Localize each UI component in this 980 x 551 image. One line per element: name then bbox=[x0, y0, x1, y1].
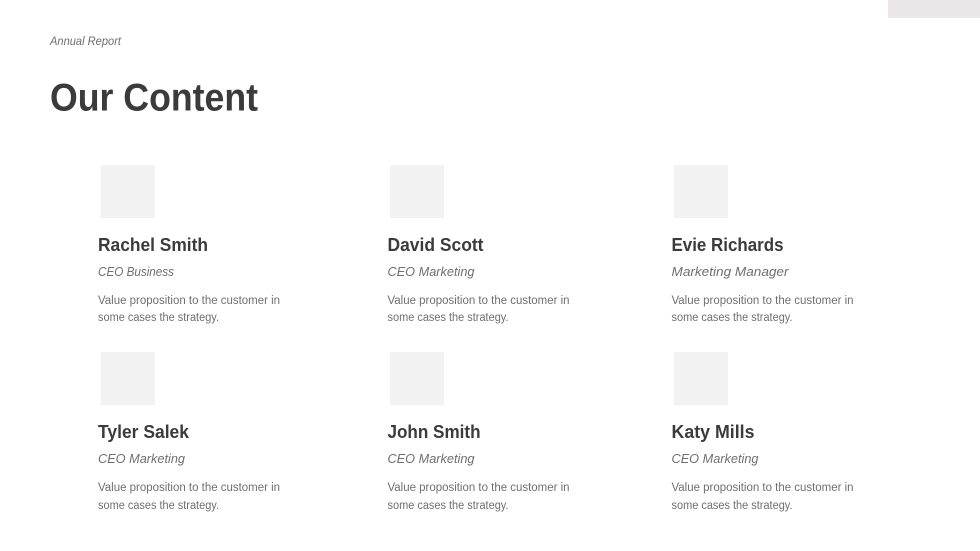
image placeholder bbox=[390, 352, 444, 405]
description: some cases the strategy. bbox=[98, 312, 219, 324]
description bbox=[388, 295, 570, 324]
description: some cases the strategy. bbox=[672, 312, 792, 324]
corner tab bbox=[888, 0, 980, 18]
description: Value proposition to the customer in bbox=[388, 295, 570, 307]
name: David Scott bbox=[388, 235, 484, 255]
description: Value proposition to the customer in bbox=[98, 482, 280, 494]
description: Value proposition to the customer in bbox=[98, 295, 280, 307]
name: Tyler Salek bbox=[98, 422, 190, 442]
role: CEO Business bbox=[98, 264, 174, 279]
description: Value proposition to the customer in bbox=[388, 482, 570, 494]
panel: David Scott bbox=[388, 165, 570, 324]
header label: Annual Report bbox=[49, 34, 122, 48]
description bbox=[672, 295, 854, 324]
role: CEO Marketing bbox=[98, 451, 186, 466]
description: some cases the strategy. bbox=[388, 312, 508, 324]
role: CEO Marketing bbox=[388, 451, 475, 466]
image placeholder bbox=[674, 165, 728, 218]
name: Evie Richards bbox=[672, 235, 784, 255]
image placeholder bbox=[390, 165, 444, 218]
description: some cases the strategy. bbox=[388, 500, 508, 512]
description: Value proposition to the customer in bbox=[672, 295, 854, 307]
panel: Rachel Smith bbox=[98, 165, 280, 324]
role: CEO Marketing bbox=[672, 451, 759, 466]
description: Value proposition to the customer in bbox=[672, 482, 854, 494]
role: Marketing Manager bbox=[672, 264, 789, 279]
title: Our Content bbox=[50, 76, 258, 120]
image placeholder bbox=[100, 352, 155, 405]
panel: Evie Richards bbox=[672, 165, 854, 324]
name: Rachel Smith bbox=[98, 235, 208, 255]
panel: John Smith bbox=[388, 352, 570, 512]
description: some cases the strategy. bbox=[672, 500, 792, 512]
panel: Tyler Salek bbox=[98, 352, 280, 512]
description bbox=[98, 295, 280, 324]
description bbox=[98, 482, 280, 512]
name: John Smith bbox=[388, 422, 480, 442]
name: Katy Mills bbox=[672, 422, 754, 442]
description bbox=[388, 482, 570, 512]
image placeholder bbox=[100, 165, 155, 218]
panel: Katy Mills bbox=[672, 352, 854, 512]
image placeholder bbox=[674, 352, 728, 405]
description bbox=[672, 482, 854, 512]
description: some cases the strategy. bbox=[98, 500, 219, 512]
role: CEO Marketing bbox=[388, 264, 475, 279]
